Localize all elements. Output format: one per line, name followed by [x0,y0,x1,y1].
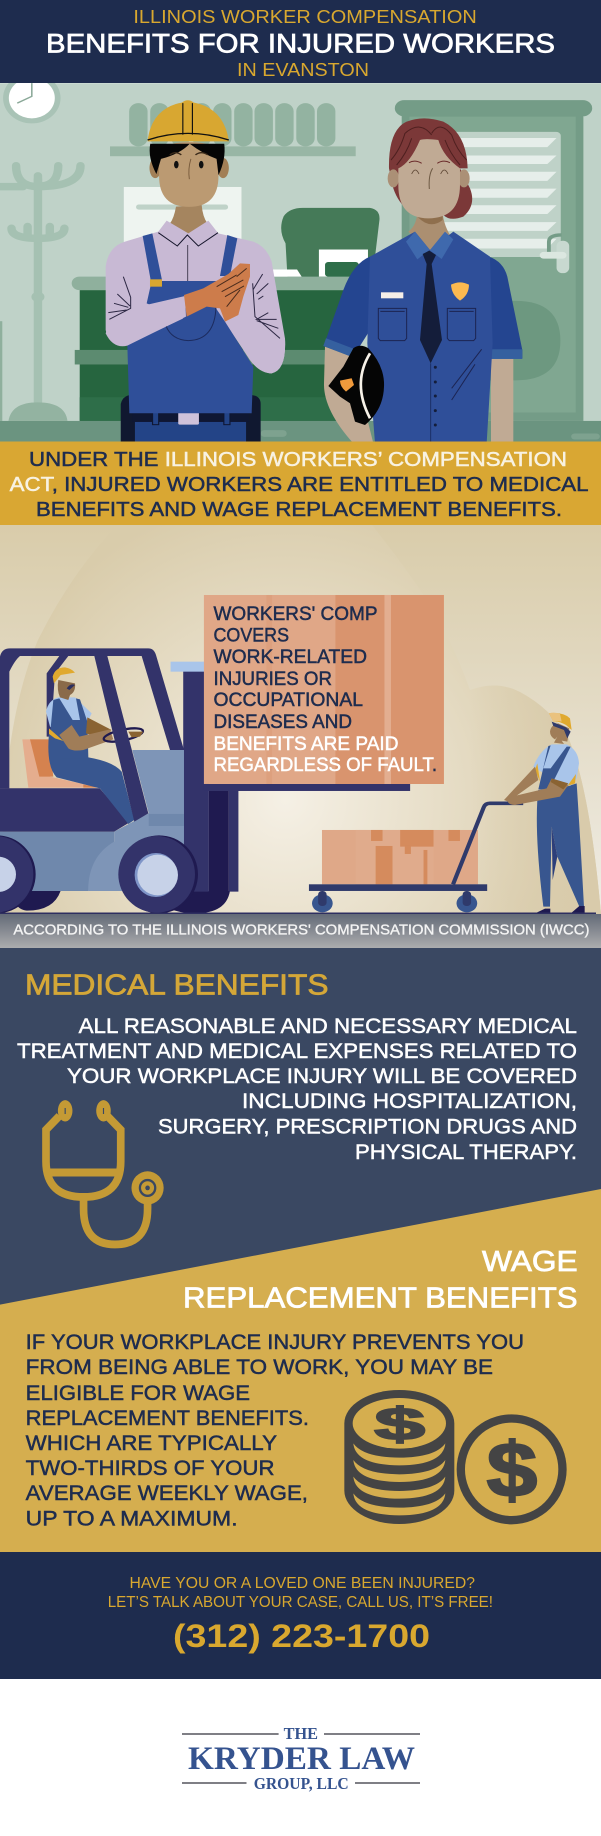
forklift wheels [0,835,198,913]
heading: wage replacement benefits: WAGE [482,1246,578,1278]
text block: wage details: AVERAGE WEEKLY WAGE, [26,1481,308,1505]
icon: coins: $ [487,1427,537,1513]
heading: medical benefits: MEDICAL BENEFITS [25,970,328,1002]
heading: wage replacement benefits [183,1246,578,1315]
icon: wall clock [3,73,61,123]
logo: the kryder law group: KRYDER LAW [188,1741,415,1777]
tool belt and trousers [121,395,261,442]
text block: medical coverage: TREATMENT AND MEDICAL EXPENSES RELATED TO [17,1039,577,1063]
text block: medical coverage [17,1014,577,1164]
text block: wage details: TWO-THIRDS OF YOUR [26,1456,275,1480]
forklift [0,648,410,913]
text block: workers' comp coverage on crate: DISEASES AND [214,711,352,733]
logo: the kryder law group: GROUP, LLC [254,1774,349,1793]
coat rack [0,166,80,421]
crate on fork [204,595,444,784]
cta line 2: LET’S TALK ABOUT YOUR CASE, CALL US, IT’S FREE! [108,1594,493,1611]
text block: workers' comp coverage on crate: COVERS [214,625,289,647]
text block: workers' comp coverage on crate [214,603,437,776]
phone number: (312) 223-1700 [173,1618,430,1654]
officer cap [328,346,384,425]
text block: wage details: ELIGIBLE FOR WAGE [26,1381,250,1405]
banner text line 1: UNDER THE ILLINOIS WORKERS’ COMPENSATION [29,448,567,471]
text block: workers' comp coverage on crate: INJURIES OR [214,668,332,690]
torso, overalls and clasped hands [106,205,285,413]
text block: workers' comp coverage on crate: WORKERS' COMP [214,603,378,625]
heading: wage replacement benefits: REPLACEMENT BENEFITS [183,1283,578,1315]
icon: coins: $ [374,1399,425,1450]
shelf with binders [110,103,356,156]
icon: coins [344,1390,567,1524]
background hump [470,685,601,914]
paper on the wall [124,187,241,246]
text block: wage details [26,1330,524,1531]
text block: medical coverage: INCLUDING HOSPITALIZATION, [242,1089,577,1113]
panel: title header [0,0,601,83]
text block: wage details: UP TO A MAXIMUM. [26,1507,238,1531]
panel: source strip [0,912,601,948]
banner text line 3: BENEFITS AND WAGE REPLACEMENT BENEFITS. [36,498,562,521]
panel: medical benefits [0,948,601,1305]
banner text line 2: ACT, INJURED WORKERS ARE ENTITLED TO MEDICAL [10,473,589,496]
background light arch [0,525,601,914]
text block: medical coverage: PHYSICAL THERAPY. [355,1140,577,1164]
office chair [281,208,380,277]
figure: worker pushing cart [504,713,585,913]
text block: medical coverage: YOUR WORKPLACE INJURY WILL BE COVERED [67,1064,577,1088]
text block: wage details: REPLACEMENT BENEFITS. [26,1406,309,1430]
text block: medical coverage: SURGERY, PRESCRIPTION DRUGS AND [158,1115,577,1139]
logo: the kryder law group: THE [284,1724,318,1743]
forklift driver and cab [0,648,184,824]
main title: BENEFITS FOR INJURED WORKERS [46,29,555,59]
head [148,100,229,207]
door [395,100,592,421]
forklift body and mast [0,662,410,913]
panel: act statement banner [0,442,601,525]
logo: the kryder law group [182,1724,420,1793]
illustration: warehouse scene with forklift [0,525,601,914]
text block: wage details: WHICH ARE TYPICALLY [26,1431,277,1455]
illustration: office scene with workers [0,73,601,443]
text block: workers' comp coverage on crate: OCCUPATIONAL [214,689,363,711]
cta line 1: HAVE YOU OR A LOVED ONE BEEN INJURED? [130,1575,475,1592]
figure: construction worker [106,100,285,442]
text block: wage details: IF YOUR WORKPLACE INJURY PREVENTS YOU [26,1330,524,1354]
panel: wage replacement benefits [0,1189,601,1552]
text block: workers' comp coverage on crate: BENEFITS ARE PAID [214,733,398,755]
text block: medical coverage: ALL REASONABLE AND NECESSARY MEDICAL [79,1014,577,1038]
source text: ACCORDING TO THE ILLINOIS WORKERS' COMPENSATION COMMISSION (IWCC) [13,922,589,938]
floor [0,421,601,442]
text block: workers' comp coverage on crate: REGARDLESS OF FAULT. [214,754,437,776]
panel: call to action footer [0,1552,601,1679]
icon: stethoscope [46,1100,164,1244]
title line 3: IN EVANSTON [237,59,369,80]
figure: uniformed officer [323,118,522,443]
text block: wage details: FROM BEING ABLE TO WORK, YOU MAY BE [26,1355,493,1379]
text block: workers' comp coverage on crate: WORK-RELATED [214,646,367,668]
cart with boxes [309,803,523,912]
office background [0,73,601,442]
desk [0,250,368,421]
title line 1: ILLINOIS WORKER COMPENSATION [133,6,477,27]
